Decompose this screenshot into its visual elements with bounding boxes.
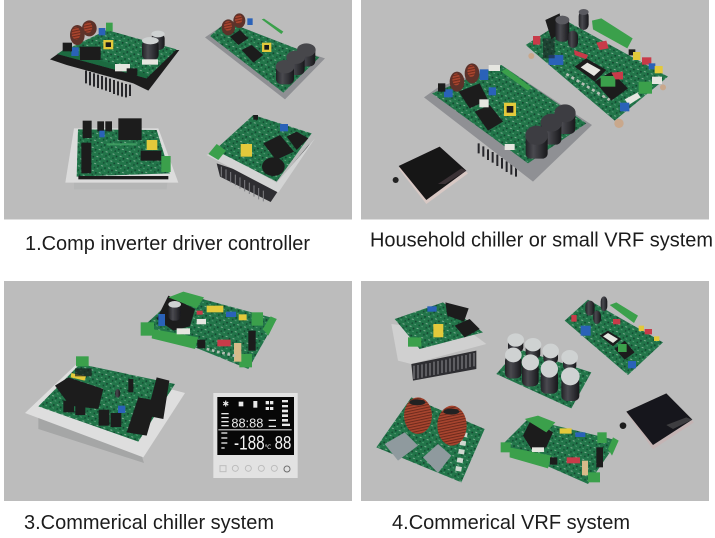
- caption 2: Household chiller or small VRF system: [370, 230, 713, 252]
- panel 1: comp inverter driver controller: [4, 0, 352, 220]
- panel: touch display controller: [213, 393, 298, 478]
- icon row on display: ✱: [222, 399, 229, 408]
- display readout: unit: ℃: [265, 445, 272, 451]
- board: heatsink module: [391, 302, 486, 381]
- display readout: time: 88:88: [231, 416, 263, 431]
- board: angled with large heatsink: [207, 115, 315, 202]
- board: filter coils: [376, 397, 485, 482]
- panel 4: commercial VRF system: [361, 281, 709, 501]
- caption 3: 3.Commerical chiller system: [24, 512, 274, 534]
- display readout: two digits: 88: [275, 432, 291, 453]
- board: terminal control board lower: [501, 416, 619, 484]
- icon: black glass display square: [620, 393, 694, 449]
- caption 4: 4.Commerical VRF system: [392, 512, 630, 534]
- display readout: temperature: -188: [234, 432, 265, 455]
- panel 3: commercial chiller system: [4, 281, 352, 501]
- icon: black glass display square: [393, 147, 468, 204]
- board: gray plate with three capacitors: [205, 13, 325, 99]
- board: silver plate with relays: [25, 356, 185, 463]
- board: terminal control board small: [565, 296, 663, 375]
- board: terminal control board: [526, 9, 668, 128]
- touch buttons: [220, 465, 290, 472]
- board: black tray with heatsink: [50, 20, 179, 97]
- board: capacitor bank: [496, 333, 591, 408]
- board: gray plate with three capacitors: [424, 63, 592, 182]
- board: silver plate top view: [65, 118, 178, 189]
- board: terminal control board: [141, 292, 277, 369]
- panel 2: household chiller or small VRF: [361, 0, 709, 220]
- caption 1: 1.Comp inverter driver controller: [25, 233, 310, 255]
